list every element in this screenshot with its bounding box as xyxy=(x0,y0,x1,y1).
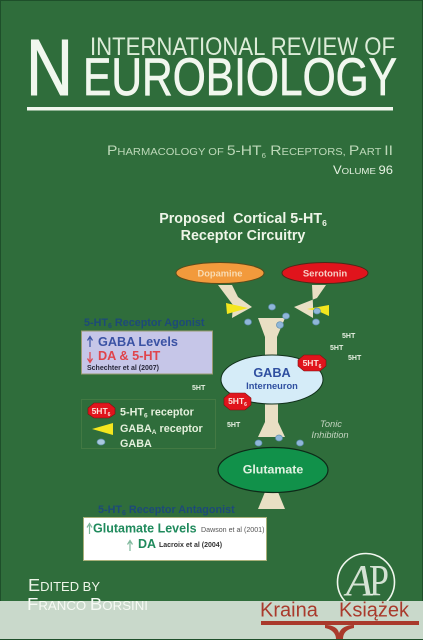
volume subtitle: R xyxy=(266,142,282,158)
antagonist panel: DA xyxy=(138,537,156,551)
antagonist panel: Lacroix et al (2004) xyxy=(159,542,222,549)
antagonist panel: Receptor Antagonist xyxy=(126,504,235,516)
5-HT6 receptor badge lower xyxy=(224,393,251,410)
5HT labels: 5HT xyxy=(227,422,241,429)
watermark wordmark xyxy=(260,600,410,622)
5-HT6 receptor badge upper: 5HT xyxy=(303,358,319,368)
glutamate neuron: Glutamate xyxy=(243,462,303,476)
legend panel: 5-HT xyxy=(120,406,144,418)
5-HT6 receptor badge upper: 6 xyxy=(319,364,322,370)
tonic inhibition label: Inhibition xyxy=(311,430,349,440)
agonist panel: GABA Levels xyxy=(98,335,178,349)
tonic inhibition label: Tonic xyxy=(320,419,342,429)
journal title: N xyxy=(26,23,73,112)
legend panel: 5HT xyxy=(92,406,108,416)
GABA interneuron: GABA xyxy=(253,366,291,380)
legend panel: 6 xyxy=(108,412,111,418)
agonist panel: 5-HT xyxy=(84,317,108,329)
watermark wordmark: Książek xyxy=(339,600,410,622)
diagram heading: Receptor Circuitry xyxy=(181,228,305,244)
agonist panel xyxy=(82,317,212,374)
volume subtitle: PHARMACOLOGY OF 5-HT xyxy=(107,142,258,158)
journal title xyxy=(26,23,397,112)
agonist panel: 6 xyxy=(108,323,112,330)
agonist panel: Schechter et al (2007) xyxy=(87,365,159,372)
volume subtitle xyxy=(107,142,393,177)
publisher logo xyxy=(338,554,394,610)
publisher logo: P xyxy=(369,556,389,605)
antagonist panel: Glutamate Levels xyxy=(93,522,197,536)
legend panel: receptor xyxy=(156,423,204,435)
5-HT6 receptor badge lower: 5HT xyxy=(228,396,244,406)
5HT labels: 5HT xyxy=(348,355,362,362)
serotonin neuron xyxy=(282,262,368,284)
5HT labels xyxy=(192,333,362,429)
title rule xyxy=(27,107,393,110)
GABA interneuron xyxy=(221,355,323,404)
legend panel xyxy=(82,400,216,450)
publisher logo: A xyxy=(343,556,374,605)
legend panel: A xyxy=(152,429,157,436)
glutamate neuron xyxy=(218,448,328,492)
diagram heading xyxy=(159,211,327,244)
bottom light strip xyxy=(0,601,423,639)
legend panel: 6 xyxy=(144,412,148,420)
GABA interneuron: Interneuron xyxy=(246,381,298,391)
GABA-A receptors yellow xyxy=(226,303,329,316)
5-HT6 receptor badge upper xyxy=(298,355,326,371)
agonist panel: Receptor Agonist xyxy=(112,317,205,329)
5HT labels: 5HT xyxy=(192,385,206,392)
5HT labels: 5HT xyxy=(330,345,344,352)
dopamine neuron: Dopamine xyxy=(198,269,242,279)
GABA vesicles xyxy=(244,304,320,446)
5-HT6 receptor badge lower: 6 xyxy=(244,402,247,408)
editor credit: EDITED BY xyxy=(28,575,101,595)
tonic inhibition label xyxy=(311,419,349,440)
watermark wordmark: Kraina xyxy=(260,600,319,622)
agonist panel: DA & 5-HT xyxy=(98,349,161,363)
antagonist panel: 5-HT xyxy=(98,504,122,516)
editor credit: FRANCO BORSINI xyxy=(27,594,148,614)
serotonin neuron: Serotonin xyxy=(303,269,347,280)
watermark bar xyxy=(261,621,419,639)
volume subtitle: ECEPTORS, PART II xyxy=(282,142,392,158)
dopamine neuron xyxy=(176,262,264,284)
antagonist panel: 6 xyxy=(122,510,126,517)
5HT labels: 5HT xyxy=(342,333,356,340)
volume subtitle: 6 xyxy=(262,153,266,160)
legend panel: receptor xyxy=(148,406,195,418)
antagonist panel: Dawson et al (2001) xyxy=(201,526,264,534)
volume subtitle: VOLUME 96 xyxy=(333,165,393,177)
legend panel: GABA xyxy=(120,438,152,450)
antagonist panel xyxy=(84,504,266,560)
legend panel: GABA xyxy=(120,423,152,435)
axon terminals xyxy=(218,285,326,509)
diagram heading: 6 xyxy=(322,218,327,228)
diagram heading: Proposed Cortical 5-HT xyxy=(159,211,322,227)
editor credit xyxy=(27,575,148,614)
